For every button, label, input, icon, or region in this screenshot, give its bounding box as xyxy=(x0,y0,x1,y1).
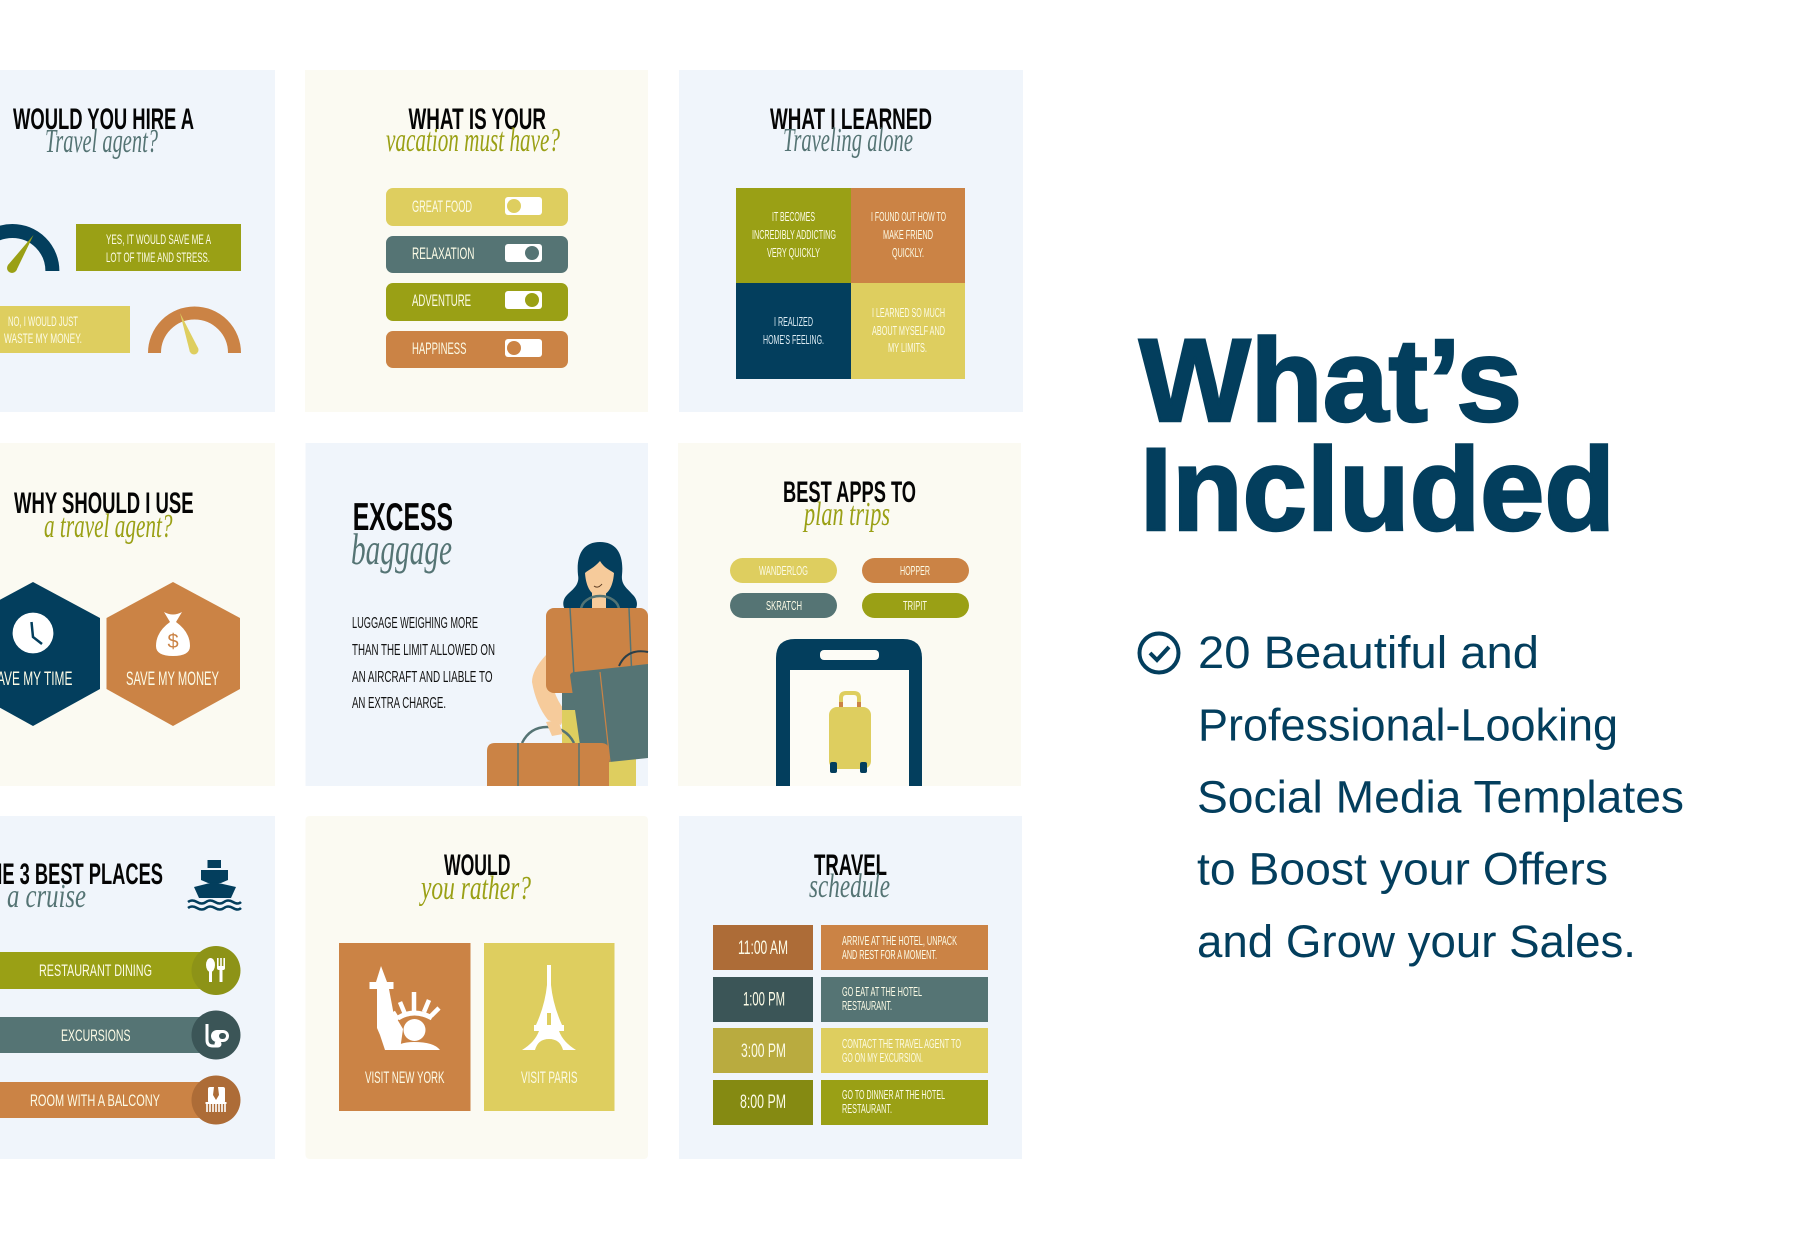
script subtitle: baggage: baggage xyxy=(351,525,452,574)
panel: travel schedule xyxy=(679,816,1022,1159)
panel: excess baggage xyxy=(306,443,648,786)
schedule row: 11:00 am: AND REST FOR A MOMENT. xyxy=(842,947,937,962)
quadrant: navy xyxy=(736,283,851,379)
icon: phone with suitcase xyxy=(776,639,922,786)
quadrant: yellow xyxy=(851,283,965,379)
toggle: adventure: ADVENTURE xyxy=(412,291,471,310)
quadrant: olive: VERY QUICKLY xyxy=(767,245,820,260)
schedule row: 8:00 pm: GO TO DINNER AT THE HOTEL xyxy=(842,1087,945,1102)
panel: would you rather xyxy=(306,816,648,1159)
script subtitle: schedule: schedule xyxy=(809,868,890,905)
heading: best apps to: BEST APPS TO xyxy=(783,476,916,509)
toggle: happiness xyxy=(386,331,568,368)
icon: ship xyxy=(188,860,241,910)
panel: the 3 best places on a cruise xyxy=(0,816,275,1159)
answer box: no: WASTE MY MONEY. xyxy=(4,330,82,346)
text block: definition: LUGGAGE WEIGHING MORE xyxy=(352,615,478,632)
text block: feature description: 20 Beautiful and xyxy=(1198,627,1539,678)
icon: statue of liberty xyxy=(370,966,440,1050)
answer box: no xyxy=(0,306,130,353)
pill: wanderlog xyxy=(730,558,837,583)
quadrant: olive: IT BECOMES xyxy=(772,209,815,224)
toggle: great food: GREAT FOOD xyxy=(412,197,472,216)
text block: definition: AN AIRCRAFT AND LIABLE TO xyxy=(352,669,492,686)
toggle: adventure xyxy=(386,283,568,321)
option card: visit paris: VISIT PARIS xyxy=(521,1068,578,1087)
pill: skratch xyxy=(730,593,837,618)
hexagon: save my time xyxy=(0,582,100,726)
heading: what is your: WHAT IS YOUR xyxy=(408,103,546,136)
text block: feature description: Social Media Templates xyxy=(1197,772,1684,822)
title: what's included: What’s xyxy=(1139,315,1522,447)
pill: wanderlog: WANDERLOG xyxy=(759,563,808,578)
answer box: yes: YES, IT WOULD SAVE ME A xyxy=(106,231,211,247)
script subtitle: plan trips: plan trips xyxy=(803,496,890,533)
schedule row: 11:00 am xyxy=(713,925,988,970)
answer box: yes: LOT OF TIME AND STRESS. xyxy=(106,249,210,265)
script subtitle: a travel agent: a travel agent? xyxy=(44,508,172,545)
schedule row: 8:00 pm: RESTAURANT. xyxy=(842,1101,892,1116)
icon: clock xyxy=(13,613,53,653)
heading: excess: EXCESS xyxy=(353,496,453,539)
quadrant: navy: HOME'S FEELING. xyxy=(763,332,824,347)
bar: room with a balcony: ROOM WITH A BALCONY xyxy=(30,1091,160,1110)
text block: feature description: Professional-Looking xyxy=(1198,700,1618,750)
hexagon: save my money xyxy=(106,582,240,726)
panel: best apps to plan trips xyxy=(678,443,1021,786)
text block: definition xyxy=(352,615,495,712)
bar: room with a balcony xyxy=(0,1076,240,1124)
icon: snorkel xyxy=(207,1024,229,1048)
toggle: relaxation: RELAXATION xyxy=(412,244,474,263)
quadrant: navy: I REALIZED xyxy=(774,314,813,329)
illustration: woman with luggage xyxy=(487,542,648,786)
quadrant: olive xyxy=(736,188,851,283)
option card: visit paris xyxy=(484,943,614,1111)
quadrant: yellow: ABOUT MYSELF AND xyxy=(872,323,945,338)
schedule row: 3:00 pm xyxy=(713,1028,988,1073)
quadrant: yellow: MY LIMITS. xyxy=(888,340,927,355)
icon: money bag xyxy=(156,612,190,656)
schedule row: 8:00 pm: 8:00 PM xyxy=(740,1092,786,1113)
heading: would: WOULD xyxy=(444,849,510,882)
quadrant: yellow: I LEARNED SO MUCH xyxy=(872,305,945,320)
panel: vacation must have xyxy=(305,70,648,412)
script subtitle: travel agent: Travel agent? xyxy=(45,123,158,160)
schedule row: 1:00 pm: 1:00 PM xyxy=(743,990,785,1010)
quadrant: orange: MAKE FRIEND xyxy=(883,227,933,242)
icon: fork and spoon xyxy=(206,958,225,982)
schedule row: 8:00 pm xyxy=(713,1080,988,1125)
icon: eiffel tower xyxy=(522,965,576,1050)
quadrant: orange xyxy=(851,188,965,283)
icon: balcony xyxy=(206,1087,226,1112)
panel: why should i use a travel agent xyxy=(0,443,275,786)
option card: visit new york: VISIT NEW YORK xyxy=(365,1068,445,1087)
heading: why should i use: WHY SHOULD I USE xyxy=(14,487,194,520)
gauge: orange xyxy=(154,313,234,354)
title: what's included xyxy=(1139,315,1615,556)
text block: feature description: to Boost your Offers xyxy=(1197,844,1608,894)
panel: would you hire a travel agent xyxy=(0,70,275,412)
bar: restaurant dining xyxy=(0,946,240,995)
quadrant: olive: INCREDIBLY ADDICTING xyxy=(752,227,836,242)
schedule row: 3:00 pm: GO ON MY EXCURSION. xyxy=(842,1050,923,1065)
heading: would you hire a: WOULD YOU HIRE A xyxy=(13,103,194,136)
answer box: no: NO, I WOULD JUST xyxy=(8,313,78,329)
text block: feature description: and Grow your Sales. xyxy=(1197,916,1636,967)
hexagon: save my money: SAVE MY MONEY xyxy=(126,669,219,690)
schedule row: 11:00 am: 11:00 AM xyxy=(738,938,788,959)
icon: money bag: $ xyxy=(167,631,179,653)
title: what's included: Included xyxy=(1140,424,1615,556)
schedule row: 11:00 am: ARRIVE AT THE HOTEL, UNPACK xyxy=(842,933,957,948)
schedule row: 3:00 pm: 3:00 PM xyxy=(741,1041,786,1062)
answer box: yes xyxy=(76,224,241,271)
schedule row: 3:00 pm: CONTACT THE TRAVEL AGENT TO xyxy=(842,1036,961,1051)
script subtitle: traveling alone: Traveling alone xyxy=(783,122,913,159)
panel: what i learned xyxy=(679,70,1023,412)
script subtitle: vacation must have: vacation must have? xyxy=(386,122,560,159)
pill: tripit xyxy=(862,593,969,618)
option card: visit new york xyxy=(339,943,470,1111)
pill: hopper: HOPPER xyxy=(900,563,930,578)
quadrant: orange: QUICKLY. xyxy=(892,245,924,260)
text block: feature description xyxy=(1197,627,1684,967)
heading: travel: TRAVEL xyxy=(814,849,887,882)
bar: restaurant dining: RESTAURANT DINING xyxy=(39,961,152,980)
icon: check circle xyxy=(1140,634,1178,672)
schedule row: 1:00 pm xyxy=(713,977,988,1022)
script subtitle: you rather: you rather? xyxy=(419,870,531,907)
text block: definition: THAN THE LIMIT ALLOWED ON xyxy=(352,642,495,659)
heading: what i learned: WHAT I LEARNED xyxy=(770,103,932,136)
schedule row: 1:00 pm: RESTAURANT. xyxy=(842,998,892,1013)
toggle: great food xyxy=(386,188,568,226)
bar: excursions xyxy=(0,1010,240,1060)
pill: tripit: TRIPIT xyxy=(903,598,927,613)
bar: excursions: EXCURSIONS xyxy=(61,1026,130,1045)
quadrant: orange: I FOUND OUT HOW TO xyxy=(871,209,946,224)
pill: hopper xyxy=(862,558,969,583)
toggle: relaxation xyxy=(386,236,568,273)
pill: skratch: SKRATCH xyxy=(766,598,802,613)
schedule row: 1:00 pm: GO EAT AT THE HOTEL xyxy=(842,984,922,999)
toggle: happiness: HAPPINESS xyxy=(412,339,466,358)
text block: definition: AN EXTRA CHARGE. xyxy=(352,695,446,712)
gauge: navy xyxy=(0,231,52,273)
